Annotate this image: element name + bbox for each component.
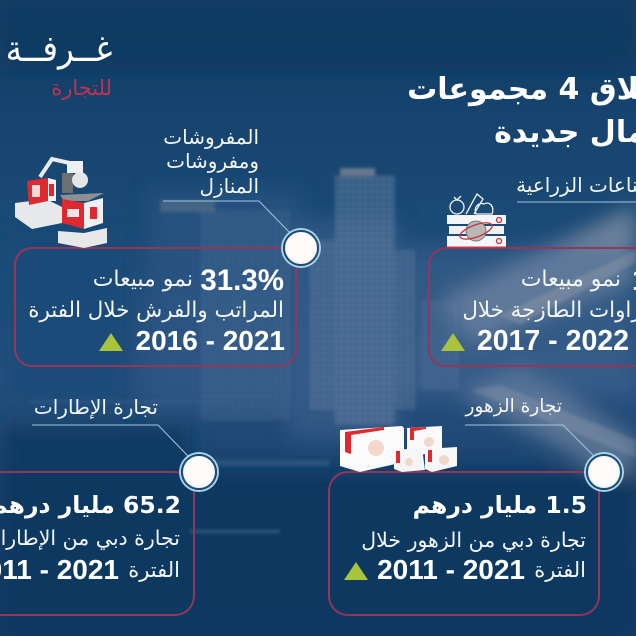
node: furniture (283, 230, 319, 266)
panel: tyre trade (0, 471, 195, 616)
stat caption: نمو مبيعات (93, 267, 193, 292)
label: furniture (163, 125, 259, 198)
stat caption: نمو مبيعات (521, 267, 621, 292)
panel: furniture sales (14, 247, 297, 367)
icon: up triangle (344, 562, 368, 580)
stat: 31.3%: 31.3% (200, 264, 284, 297)
years: 2011 - 2021 (377, 554, 525, 585)
logo: chamber name: غــرفــة (5, 29, 112, 70)
label: tyres: تجارة الإطارات (34, 395, 158, 419)
logo: red subtitle: للتجارة (51, 76, 112, 100)
panel text: agriculture (462, 264, 636, 357)
years: 2017 - 2022 (477, 325, 629, 357)
title (407, 72, 636, 150)
period word: الفترة (128, 558, 180, 582)
label line 2: ومفروشات (166, 149, 259, 173)
panel: flower trade (328, 471, 600, 616)
period word: الفترة (534, 558, 586, 582)
icon: crate of produce with globe (447, 193, 506, 248)
label line 3: المنازل (199, 174, 259, 198)
panel text: furniture (28, 264, 285, 356)
panel text: tyres (0, 491, 181, 585)
node: tyres (181, 454, 217, 490)
body line: المراتب والفرش خلال الفترة (28, 298, 284, 323)
label: flowers: تجارة الزهور (466, 396, 562, 417)
icon: up triangle (99, 333, 123, 351)
icon: flower boxes (340, 426, 457, 472)
icon: up triangle (441, 333, 465, 351)
body line: تجارة دبي من الزهور خلال (361, 528, 586, 552)
panel text: flowers (361, 491, 587, 585)
years: 2016 - 2021 (136, 325, 285, 356)
stat: 1.5 مليار درهم (413, 491, 587, 519)
node: flowers (586, 454, 622, 490)
panel: agriculture sales (428, 247, 636, 367)
icon: robot arm with boxes (15, 156, 107, 248)
label line 1: المفروشات (163, 125, 259, 149)
